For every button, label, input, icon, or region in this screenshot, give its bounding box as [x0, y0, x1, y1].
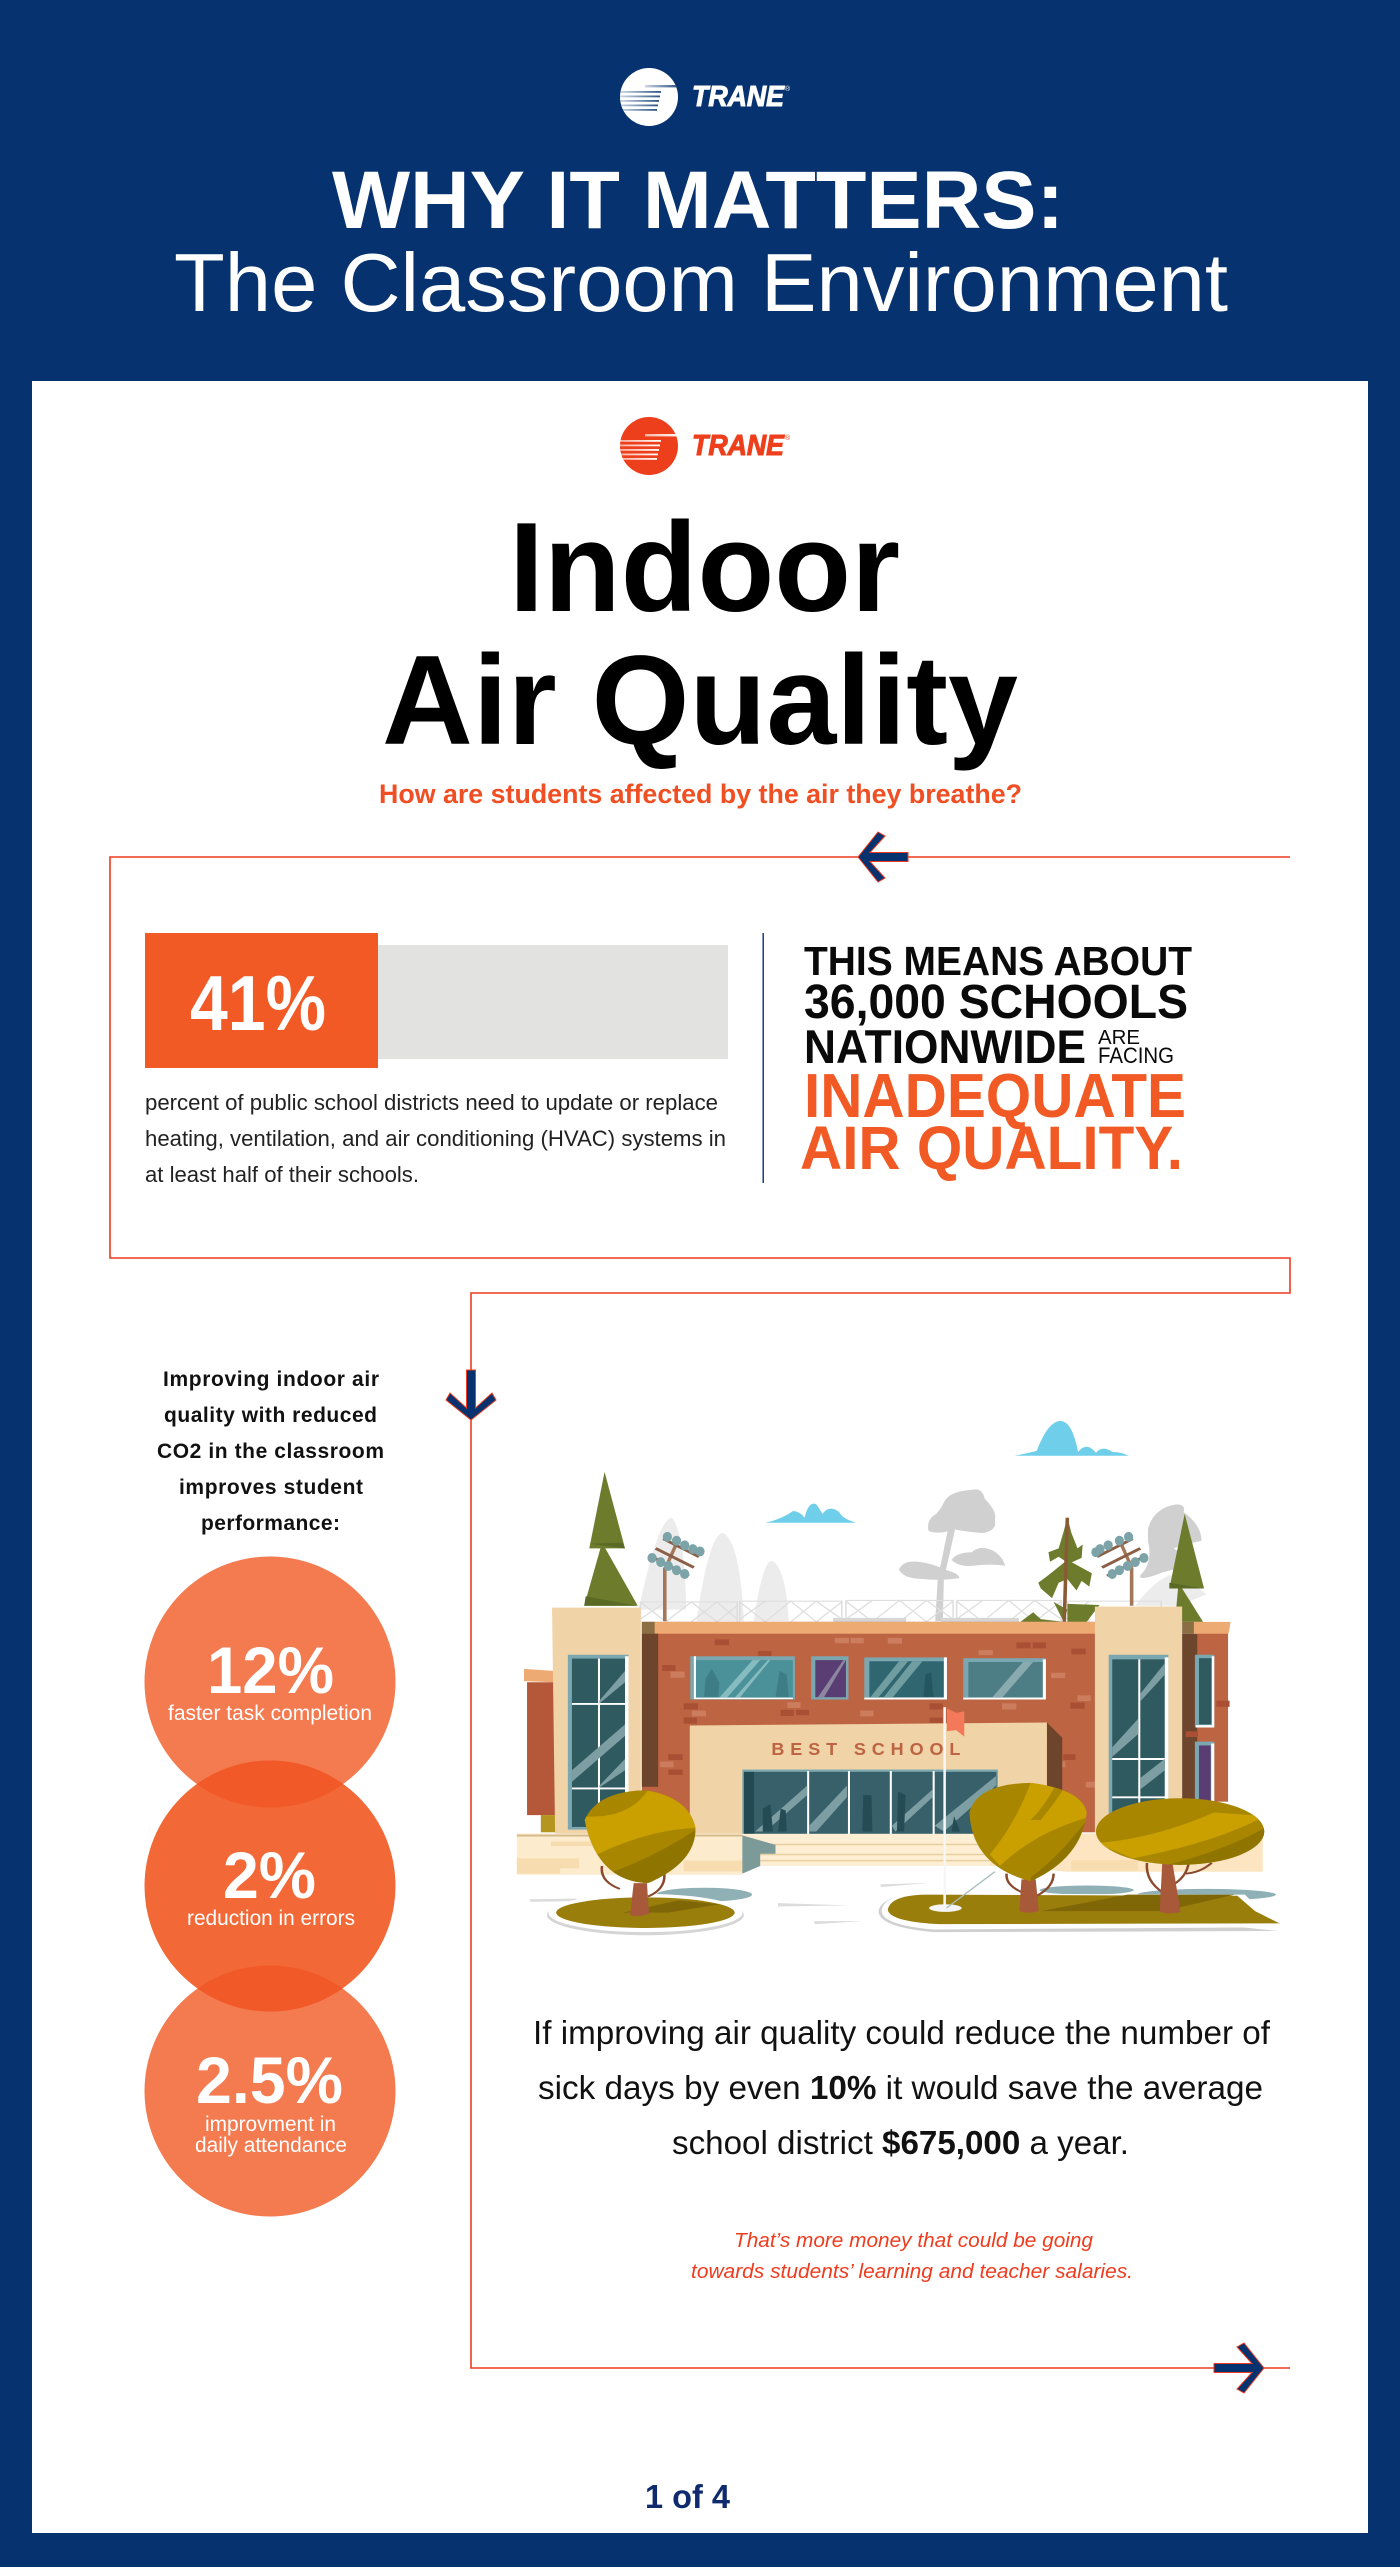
plinth and steps: [517, 1833, 1263, 1875]
building: main brick wall: [642, 1622, 1096, 1832]
italic note: [691, 2229, 1133, 2283]
circle: 2% reduction in errors: 2%: [223, 1838, 316, 1912]
white logo: Trane: ®: [785, 85, 791, 93]
white logo: Trane: TRANE: [692, 81, 786, 113]
tree: left: [582, 1790, 704, 1916]
circle: 12% faster task completion: [144, 1556, 396, 1808]
callout: 36,000 schools: NATIONWIDE: [804, 1020, 1086, 1073]
performance intro text: improves student: [179, 1476, 363, 1499]
italic note: towards students’ learning and teacher salaries.: [691, 2260, 1133, 2283]
stadium light: left: [647, 1532, 705, 1621]
vertical divider: [762, 933, 764, 1183]
circle: 2.5% daily attendance: 2.5%: [196, 2043, 343, 2117]
stat description: heating, ventilation, and air conditioning (HVAC) systems in: [145, 1126, 726, 1151]
stadium light: right: [1091, 1532, 1148, 1606]
tree shadows: [656, 1885, 1276, 1902]
stat circles: [144, 1556, 396, 2216]
pine tree: right: [1169, 1514, 1204, 1622]
building: upper windows: [690, 1656, 1046, 1700]
circle: 2.5% daily attendance: daily attendance: [195, 2134, 347, 2157]
cloud: small: [765, 1504, 856, 1523]
building: left tower: [552, 1608, 641, 1833]
orange logo: Trane: [620, 417, 791, 475]
header title: [174, 155, 1228, 329]
grey background trees: [899, 1489, 1202, 1621]
sick days text: sick days by even 10% it would save the average: [538, 2069, 1263, 2106]
stat description: at least half of their schools.: [145, 1162, 419, 1187]
stat: 41% progress bar: [145, 933, 728, 1068]
building: entrance block: [690, 1722, 1062, 1835]
header title: The Classroom Environment: [174, 236, 1228, 329]
stat description: percent of public school districts need to update or replace: [145, 1090, 718, 1115]
circle: 2% reduction in errors: reduction in errors: [187, 1907, 355, 1930]
lawn: right island: [879, 1894, 1280, 1932]
circle: 2.5% daily attendance: [144, 1966, 396, 2216]
performance intro text: Improving indoor air: [163, 1368, 379, 1391]
building: right tower and wing: [1095, 1607, 1231, 1832]
tree: right: [1096, 1798, 1265, 1913]
stat description: [145, 1090, 726, 1187]
performance intro text: quality with reduced: [164, 1404, 377, 1427]
connector line: [110, 857, 1290, 2368]
circle: 12% faster task completion: faster task completion: [168, 1702, 372, 1725]
sick days text: school district $675,000 a year.: [672, 2124, 1129, 2161]
circle: 2% reduction in errors: [144, 1760, 396, 2012]
pine tree: left: [584, 1472, 638, 1606]
arrow: left: [858, 832, 908, 882]
ground marks: [530, 1883, 931, 1924]
callout: 36,000 schools: FACING: [1098, 1043, 1174, 1068]
callout: 36,000 schools: [800, 938, 1192, 1182]
building: left annex: [524, 1669, 556, 1832]
white logo: Trane: [620, 68, 791, 126]
fir tree: [1020, 1517, 1099, 1622]
school illustration: [517, 1421, 1280, 1935]
lawn: left island: [547, 1894, 744, 1935]
school sign: BEST SCHOOL: [771, 1739, 960, 1759]
main title: Indoor Air Quality: [382, 496, 1018, 771]
flag pole and flag: [929, 1707, 995, 1912]
italic note: That’s more money that could be going: [734, 2229, 1094, 2252]
stat: 41% progress bar: 41%: [190, 959, 326, 1047]
tree: middle: [969, 1783, 1092, 1913]
orange logo: Trane: ®: [785, 434, 791, 442]
performance intro text: performance:: [201, 1512, 340, 1535]
callout: 36,000 schools: ARE: [1098, 1027, 1140, 1049]
performance intro text: [157, 1368, 384, 1535]
sick days text: [533, 2014, 1271, 2161]
background hills: [639, 1518, 1207, 1621]
arrow: down: [446, 1370, 496, 1420]
main title: Indoor Air Quality: Indoor: [509, 496, 900, 638]
callout: 36,000 schools: AIR QUALITY.: [800, 1114, 1183, 1182]
subtitle question: How are students affected by the air they breathe?: [379, 779, 1022, 809]
main title: Indoor Air Quality: Air Quality: [382, 629, 1018, 771]
cloud: large: [1014, 1421, 1129, 1456]
sick days text: If improving air quality could reduce the number of: [533, 2014, 1271, 2051]
callout: 36,000 schools: 36,000 SCHOOLS: [804, 976, 1188, 1029]
page number: 1 of 4: [645, 2478, 731, 2515]
callout: 36,000 schools: THIS MEANS ABOUT: [804, 938, 1192, 984]
rooftop fence: [640, 1600, 1161, 1623]
circle: 2.5% daily attendance: improvment in: [205, 2113, 336, 2136]
orange logo: Trane: TRANE: [692, 430, 786, 462]
callout: 36,000 schools: INADEQUATE: [804, 1062, 1186, 1131]
header title: WHY IT MATTERS:: [332, 155, 1064, 246]
circle: 12% faster task completion: 12%: [207, 1633, 334, 1707]
performance intro text: CO2 in the classroom: [157, 1440, 384, 1463]
arrow: right: [1214, 2343, 1264, 2393]
